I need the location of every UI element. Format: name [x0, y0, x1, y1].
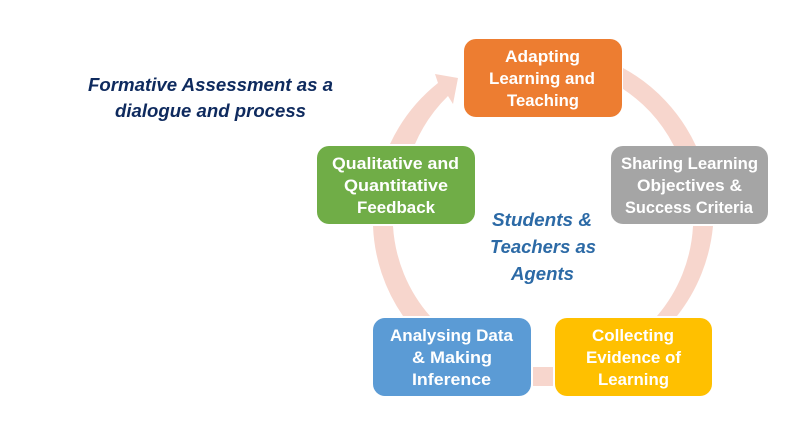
box: collecting evidence	[555, 318, 712, 396]
arrow: sharing to collecting	[657, 226, 713, 316]
box: sharing learning objectives: Sharing Learning	[621, 155, 758, 173]
center label: Students &	[492, 209, 592, 230]
arrow: collecting to analysing	[533, 367, 553, 386]
title: Formative Assessment as a	[88, 74, 333, 95]
box: adapting learning and teaching	[464, 39, 622, 117]
box: analysing data: & Making	[412, 349, 492, 367]
box: sharing learning objectives: Success Criteria	[625, 199, 754, 217]
box: collecting evidence: Collecting	[592, 327, 674, 345]
box: analysing data	[373, 318, 531, 396]
cycle diagram	[317, 39, 768, 396]
box: adapting learning and teaching: Learning and	[489, 70, 595, 88]
box: qualitative and quantitative feedback: Quantitative	[344, 177, 448, 195]
box: analysing data: Analysing Data	[390, 327, 514, 345]
center label	[490, 209, 596, 284]
title: dialogue and process	[115, 100, 306, 121]
box: collecting evidence: Learning	[598, 371, 669, 389]
box: adapting learning and teaching: Adapting	[505, 48, 580, 66]
arrow: analysing to feedback	[373, 226, 430, 316]
box: sharing learning objectives	[611, 146, 768, 224]
box: analysing data: Inference	[412, 371, 491, 389]
box: collecting evidence: Evidence of	[586, 349, 682, 367]
arrow: feedback to adapting	[390, 74, 458, 144]
box: qualitative and quantitative feedback: Qualitative and	[332, 155, 459, 173]
box: adapting learning and teaching: Teaching	[507, 92, 579, 110]
box: qualitative and quantitative feedback: Feedback	[357, 199, 436, 217]
center label: Teachers as	[490, 236, 596, 257]
title	[88, 74, 333, 121]
arrow: adapting to sharing	[623, 68, 696, 146]
box: sharing learning objectives: Objectives &	[637, 177, 742, 195]
center label: Agents	[510, 263, 574, 284]
box: qualitative and quantitative feedback	[317, 146, 475, 224]
